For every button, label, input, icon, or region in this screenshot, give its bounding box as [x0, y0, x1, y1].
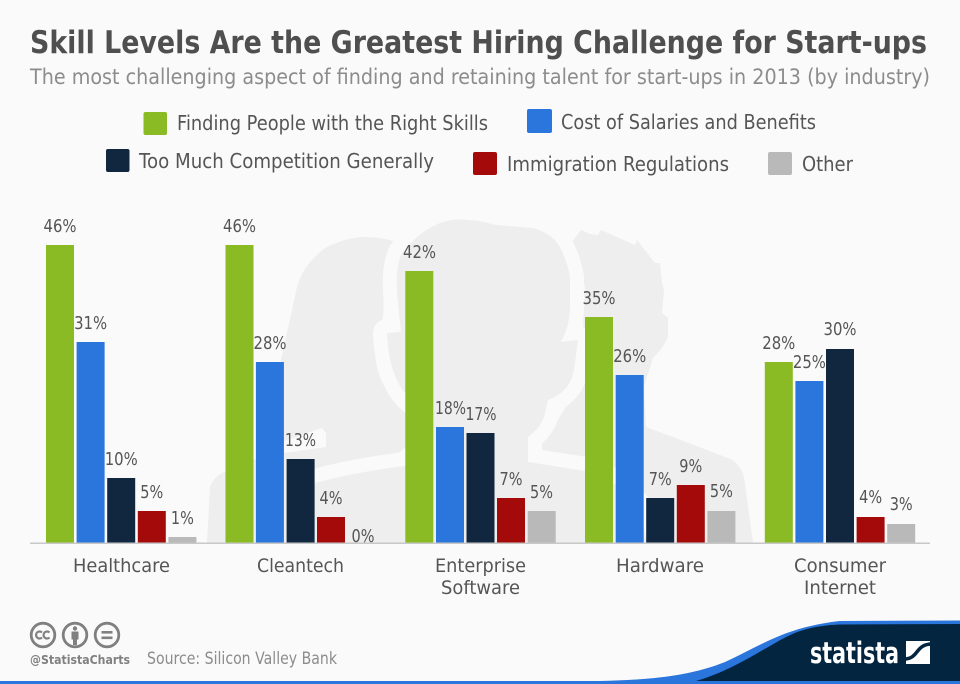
bar group: Cleantech: 46% — [223, 217, 256, 237]
icon: Creative Commons licence badges — [31, 623, 119, 647]
legend item: Other — [768, 152, 853, 176]
bar group: Consumer Internet: 4% — [859, 488, 882, 508]
legend item: Other: Other — [802, 152, 853, 176]
bar group: Hardware — [582, 289, 735, 577]
bar group: Consumer Internet: 30% — [824, 320, 856, 340]
bar group: Hardware: 35% — [582, 289, 616, 309]
bar group: Enterprise Software: 18% — [435, 399, 466, 419]
bar group: Hardware: 7% — [649, 470, 672, 490]
logo mark — [904, 641, 932, 664]
bar group: Healthcare: 1% — [171, 509, 194, 529]
bar group: Cleantech: 4% — [320, 489, 342, 509]
bar group: Healthcare: Healthcare — [73, 555, 170, 577]
bar chart — [30, 217, 930, 599]
legend item: Cost of Salaries and Benefits: Cost of Salaries and Benefits — [561, 110, 816, 134]
bar group: Enterprise Software: 42% — [403, 243, 436, 263]
source: Source: Silicon Valley Bank — [147, 649, 337, 668]
bar group: Enterprise Software: 7% — [500, 470, 522, 490]
bar group: Consumer Internet: Consumer — [794, 555, 886, 577]
x axis line — [30, 542, 930, 544]
bar group: Healthcare: 31% — [74, 314, 107, 334]
bar group: Cleantech — [223, 217, 374, 577]
bar group: Hardware: 5% — [710, 482, 733, 502]
bar group: Enterprise Software: 5% — [530, 483, 553, 503]
logo wordmark: statista — [810, 636, 899, 670]
bar group: Cleantech: 28% — [254, 334, 286, 354]
bar group: Hardware: 26% — [613, 347, 646, 367]
bar group: Cleantech: 0% — [352, 527, 374, 547]
social handle: @StatistaCharts — [30, 652, 130, 667]
bar group: Enterprise Software — [403, 243, 556, 599]
bar group: Consumer Internet — [762, 320, 915, 599]
bar group: Healthcare: 10% — [105, 450, 138, 470]
bar group: Enterprise Software: Enterprise — [435, 555, 526, 577]
legend — [106, 109, 853, 176]
footer wave with statista logo — [0, 620, 960, 684]
bar group: Healthcare: 46% — [44, 217, 76, 237]
bar group: Hardware: 9% — [679, 457, 702, 477]
legend item: Finding People with the Right Skills: Finding People with the Right Skills — [177, 111, 488, 135]
bar group: Hardware: Hardware — [616, 555, 704, 577]
legend item: Too Much Competition Generally: Too Much Competition Generally — [138, 149, 434, 173]
background silhouettes of three people — [200, 220, 760, 560]
bar group: Healthcare — [44, 217, 196, 577]
legend item: Immigration Regulations: Immigration Regulations — [507, 152, 729, 176]
bar group: Consumer Internet: 25% — [793, 353, 826, 373]
bar group: Enterprise Software: 17% — [466, 405, 496, 425]
bar group: Enterprise Software: Software — [441, 577, 520, 599]
bar group: Consumer Internet: Internet — [804, 577, 876, 599]
bar group: Cleantech: Cleantech — [257, 555, 344, 577]
bar group: Consumer Internet: 3% — [890, 495, 913, 515]
bar group: Cleantech: 13% — [285, 431, 316, 451]
bar group: Consumer Internet: 28% — [762, 334, 795, 354]
bar group: Healthcare: 5% — [140, 483, 163, 503]
